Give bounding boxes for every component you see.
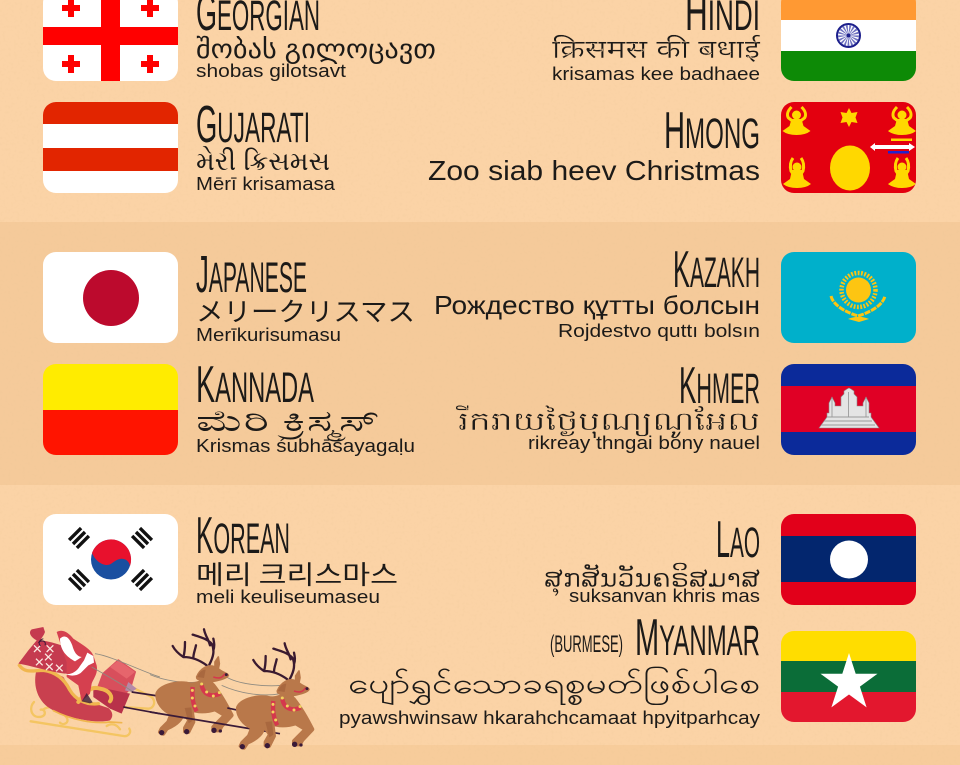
flag: India	[781, 0, 916, 81]
gift boxes	[93, 660, 137, 714]
sack snowflakes	[34, 639, 63, 671]
flag: Cambodia	[781, 364, 916, 455]
text: Georgian	[196, 0, 436, 81]
text: Gujarati: GUJARATI	[196, 96, 310, 154]
sleigh body	[35, 672, 112, 721]
reins	[150, 675, 282, 695]
sack	[18, 627, 82, 674]
text: Kannada: KANNADA	[196, 356, 314, 414]
text: Lao: suksanvan khris mas	[569, 585, 760, 606]
text: Georgian: შობას გილოცავთ	[196, 34, 436, 64]
text: Lao: LAO	[716, 511, 760, 569]
sleigh runners	[31, 687, 154, 736]
text: Gujarati: મેરી ક્રિસમસ	[196, 146, 330, 176]
text: Japanese	[196, 246, 415, 345]
text: Hmong	[428, 102, 760, 186]
text: Myanmar: ပျော်ရွှင်သောခရစ္စမတ်ဖြစ်ပါစေ	[348, 665, 760, 706]
reindeer 1	[157, 629, 232, 735]
text: Kazakh: Rojdestvo quttı bolsın	[558, 320, 760, 341]
text: Kannada: ಮೆರಿ ಕ್ರಿಸ್ಮಸ್	[196, 405, 380, 441]
text: Japanese: Merīkurisumasu	[196, 324, 341, 345]
text: Gujarati: Mērī krisamasa	[196, 173, 336, 194]
text: Kazakh: Рождество құтты болсын	[434, 290, 760, 320]
text: Lao	[544, 511, 760, 606]
flag: Hmong	[781, 102, 916, 193]
text: Korean: KOREAN	[196, 507, 290, 565]
flag: Gujarati	[43, 102, 178, 193]
text: Khmer: រីករាយថ្ងៃបុណ្យណូអែល	[456, 405, 760, 439]
Santa	[57, 631, 97, 703]
illustration: reindeer pair	[150, 629, 312, 749]
text: Hmong: HMONG	[664, 102, 760, 160]
reindeer 2	[238, 643, 312, 749]
text: Myanmar	[339, 609, 761, 728]
text: Myanmar: (BURMESE)	[550, 631, 623, 658]
text: Khmer: KHMER	[679, 357, 760, 415]
text: Myanmar: pyawshwinsaw hkarahchcamaat hpyitparhcay	[339, 707, 761, 728]
text: Lao: ສຸກສັນວັນຄຣິສມາສ	[544, 563, 760, 597]
flag: Kazakhstan	[781, 252, 916, 343]
text: Kannada: Krismas śubhāśayagaḷu	[196, 435, 415, 456]
illustration: Santa's sleigh	[18, 627, 160, 736]
text: Kazakh: KAZAKH	[673, 241, 760, 299]
sleigh gold trim	[19, 665, 122, 723]
text: Hindi: क्रिसमस की बधाई	[552, 34, 762, 64]
text: Korean: meli keuliseumaseu	[196, 586, 380, 607]
poles	[150, 708, 280, 734]
text: Kannada	[196, 356, 415, 456]
reins	[92, 654, 160, 692]
text: Hmong: Zoo siab heev Christmas	[428, 155, 760, 186]
flag: Kannada	[43, 364, 178, 455]
text: Gujarati	[196, 96, 336, 194]
text: Kazakh	[434, 241, 760, 341]
flag: Georgia	[43, 0, 178, 81]
text: Japanese: メリークリスマス	[196, 292, 415, 329]
text: Hindi: krisamas kee badhaee	[552, 63, 760, 84]
text: Khmer: rikreay thngai bony nauel	[528, 432, 760, 453]
text: Georgian: shobas gilotsavt	[196, 60, 346, 81]
text: Hindi	[552, 0, 762, 84]
flag: South Korea	[43, 514, 178, 605]
text: Korean: 메리 크리스마스	[196, 555, 398, 592]
text: Japanese: JAPANESE	[196, 246, 307, 304]
text: Khmer	[456, 357, 760, 453]
flag: Japan	[43, 252, 178, 343]
text: Korean	[196, 507, 398, 607]
text: Myanmar: MYANMAR	[635, 609, 760, 667]
flag: Laos	[781, 514, 916, 605]
poles	[123, 692, 160, 714]
flag: Myanmar	[781, 631, 916, 722]
